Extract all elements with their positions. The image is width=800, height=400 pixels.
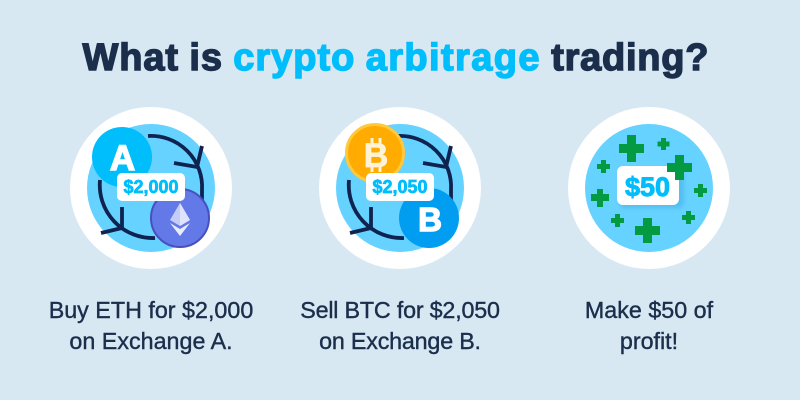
caption: step 2: Sell BTC for $2,050 — [300, 297, 500, 323]
icon: green plus signs — [591, 135, 707, 243]
label shadow — [620, 170, 684, 208]
badge: exchange B: B — [418, 201, 442, 238]
icon: circular arrows — [100, 136, 202, 238]
price label: $2,000 — [117, 173, 185, 201]
caption: step 2 — [300, 297, 500, 354]
coin: Ethereum — [151, 189, 209, 247]
badge: exchange B — [399, 188, 459, 248]
caption: step 1 — [49, 297, 253, 354]
title: What is crypto arbitrage trading? — [82, 37, 709, 79]
price label: $2,050 — [366, 173, 434, 201]
badge: exchange A: A — [110, 139, 135, 178]
caption: step 1: Buy ETH for $2,000 — [49, 297, 253, 323]
caption: step 2: on Exchange B. — [319, 328, 481, 354]
caption: step 3: Make $50 of — [585, 297, 713, 323]
caption: step 3 — [585, 297, 714, 354]
icon: buy ETH on exchange A — [70, 107, 232, 269]
price label: $2,000: $2,000 — [123, 177, 179, 197]
coin: Bitcoin: B — [364, 137, 388, 175]
icon: sell BTC on exchange B — [319, 107, 481, 269]
caption: step 3: profit! — [620, 328, 678, 354]
caption: step 1: on Exchange A. — [69, 328, 233, 354]
icon: circular arrows — [349, 136, 451, 238]
price label: $2,050: $2,050 — [372, 177, 428, 197]
icon: profit — [568, 107, 730, 269]
coin: Bitcoin — [346, 124, 404, 182]
profit label: $50: $50 — [625, 172, 670, 202]
badge: exchange A — [92, 127, 152, 187]
profit label: $50 — [617, 166, 679, 205]
